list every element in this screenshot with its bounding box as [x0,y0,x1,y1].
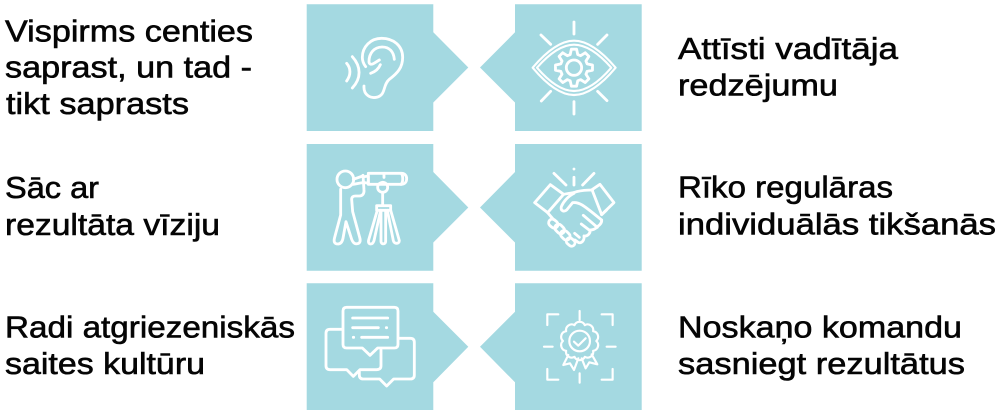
panel: chat [307,283,468,410]
icon: award badge [544,311,616,383]
text: one-on-one meetings: Rīko regulāras [678,170,893,205]
text: feedback culture: Radi atgriezeniskās [5,310,295,344]
text: feedback culture: saites kultūru [5,346,205,381]
text: team results: sasniegt rezultātus [678,346,965,381]
panel: handshake [480,144,642,271]
icon: eye with gear [533,22,616,114]
icon: chat bubbles [326,307,414,386]
panel: ear [307,4,468,131]
text: understand first: saprast, un tad - [5,50,252,85]
panel: badge [480,283,642,410]
text: result vision: rezultāta vīziju [5,207,220,242]
text: understand first: Vispirms centies [5,14,253,49]
text: team results [678,310,965,381]
text: understand first: tikt saprasts [6,86,189,121]
icon: handshake [535,169,614,248]
text: leader vision: Attīsti vadītāja [678,31,899,66]
panel: telescope [307,144,468,271]
text: team results: Noskaņo komandu [678,310,962,345]
icon: ear [347,38,403,97]
text: result vision [5,170,220,242]
text: leader vision [678,31,899,103]
text: feedback culture [5,310,295,381]
text: understand first [5,14,253,121]
icon: person with telescope [334,171,407,244]
panel: eye [480,4,642,131]
text: one-on-one meetings [678,170,996,241]
text: result vision: Sāc ar [5,170,99,205]
text: one-on-one meetings: individuālās tikšanās [678,206,996,241]
text: leader vision: redzējumu [678,68,838,103]
